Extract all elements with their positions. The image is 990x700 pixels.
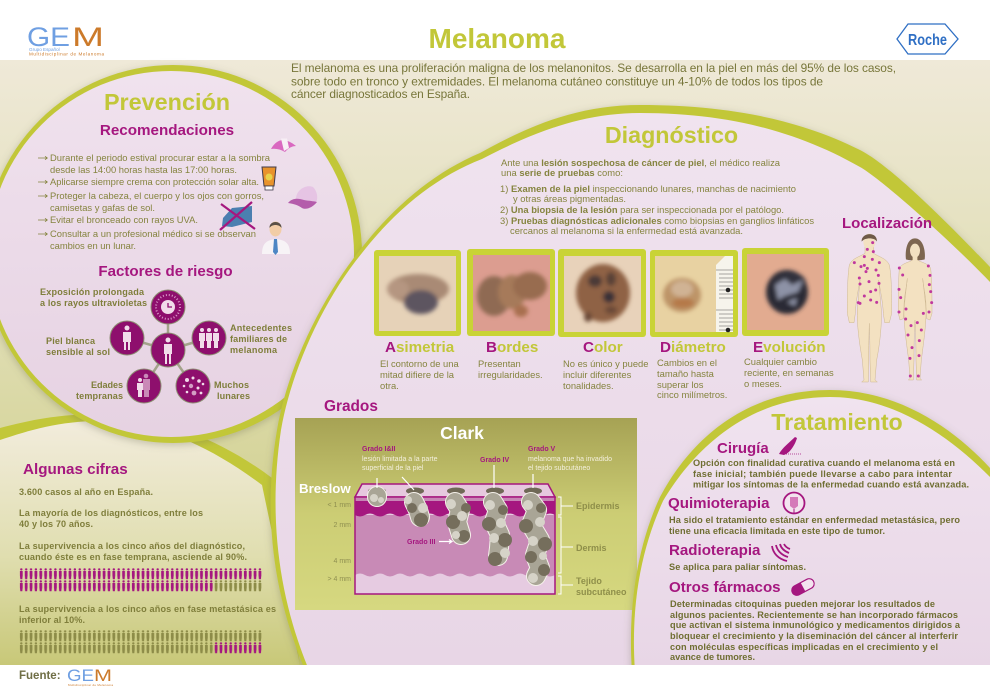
ABCDE labels: Evolución: [753, 339, 826, 356]
diagnosis text: [500, 157, 814, 236]
ABCDE descriptions: o meses.: [744, 378, 782, 389]
icon: person fair skin: [123, 326, 131, 350]
recommendations list: Durante el periodo estival procurar estar a la sombra: [50, 152, 271, 163]
treatment: cirugía: fase inicial; también puede llevarse a cabo para intentar: [693, 469, 952, 479]
panel: Clark diagram: [295, 418, 637, 610]
pictogram: 10 percent survival: [19, 630, 262, 654]
treatment: otros fármacos: Otros fármacos: [669, 579, 781, 596]
female figure: [897, 238, 933, 380]
panel: algunas cifras background: [0, 414, 300, 665]
source: Multidisciplinar de Melanoma: [68, 683, 113, 687]
recommendations list: Aplicarse siempre crema con protección solar alta.: [50, 176, 259, 187]
treatment: radioterapia: Radioterapia: [669, 542, 761, 559]
icon: cap: [288, 186, 317, 209]
layer labels: Tejido: [576, 576, 602, 586]
layer brackets: [558, 497, 573, 594]
recommendations list: camisetas y gafas de sol.: [50, 202, 155, 213]
icon: pill: [790, 577, 816, 597]
ABCDE descriptions: Presentan: [478, 358, 521, 369]
ABCDE descriptions: incluir diferentes: [563, 369, 632, 380]
logo: GEM: Grupo Español: [29, 47, 60, 52]
figures text: inferior al 10%.: [19, 615, 85, 625]
icon: ages: [137, 374, 150, 397]
recommendations list: Evitar el bronceado con rayos UVA.: [50, 214, 198, 225]
risk factor labels: Edades: [91, 380, 123, 390]
treatment: cirugía: Cirugía: [717, 440, 769, 457]
skin block: [355, 484, 555, 594]
grade labels: lesión limitada a la parte: [362, 456, 438, 463]
ABCDE descriptions: El contorno de una: [380, 358, 459, 369]
photo: bordes: [467, 249, 555, 336]
photo: color: [558, 249, 646, 337]
heading: Grados: Grados: [324, 398, 378, 415]
treatment: quimioterapia: Ha sido el tratamiento estándar en enfermedad metastásica, pero: [669, 515, 960, 525]
heading: Algunas cifras: Algunas cifras: [23, 461, 128, 478]
treatment: otros fármacos: Determinadas citoquinas pueden mejorar los resultados de: [670, 599, 935, 609]
ABCDE descriptions: reciente, en semanas: [744, 367, 834, 378]
ABCDE descriptions: mitad difiere de la: [380, 369, 455, 380]
ruler: [716, 256, 733, 332]
melanoma columns: [368, 488, 552, 583]
treatment: quimioterapia: [668, 492, 960, 536]
intro text: sobre todo en tronco y extremidades. El melanoma cutáneo constituye un 4-10% de todos los tipos de: [291, 74, 823, 88]
logo: GEM: [27, 22, 104, 56]
ABCDE descriptions: tonalidades.: [563, 380, 614, 391]
treatment: otros fármacos: que activan el sistema inmunológico y medicamentos dirigidos a: [670, 620, 961, 630]
ABCDE descriptions: cinco milímetros.: [657, 389, 727, 400]
recommendations list: Consultar a un profesional médico si se observan: [50, 228, 256, 239]
icon: family: [199, 328, 219, 348]
grade labels: [362, 446, 612, 546]
grade labels: superficial de la piel: [362, 465, 424, 472]
diagnosis text: cercanos al melanoma si la enfermedad está avanzada.: [510, 225, 743, 236]
figures text: 40 y los 70 años.: [19, 519, 93, 529]
treatment: cirugía: [693, 437, 969, 490]
intro text: cáncer diagnosticados en España.: [291, 87, 470, 101]
recommendations list: [38, 152, 271, 251]
heading: Tratamiento: Tratamiento: [771, 409, 903, 435]
breslow scale: 4 mm: [334, 558, 351, 565]
risk factor labels: sensible al sol: [46, 347, 110, 357]
risk factor labels: lunares: [217, 391, 250, 401]
logo: GEM: Multidisciplinar de Melanoma: [29, 52, 104, 56]
intro text: El melanoma es una proliferación maligna de los melanonitos. Se desarrolla en la piel en más del 95% de los casos,: [291, 61, 896, 75]
risk factor diagram: [110, 290, 226, 403]
body map: [847, 234, 933, 382]
risk factor labels: melanoma: [230, 345, 278, 355]
risk factor labels: Antecedentes: [230, 323, 292, 333]
grade labels: Grado V: [528, 446, 556, 453]
male figure: [847, 234, 892, 382]
layer labels: subcutáneo: [576, 587, 627, 597]
icon: radiation waves: [772, 544, 790, 561]
grade labels: Grado III: [407, 539, 435, 546]
intro text: [291, 61, 896, 101]
heading: Diagnóstico: Diagnóstico: [605, 122, 738, 148]
title: Melanoma: [429, 23, 566, 54]
heading: Factores de riesgo: Factores de riesgo: [98, 263, 233, 280]
panel: tratamiento shape: [631, 390, 990, 672]
diagnosis text: una serie de pruebas como:: [501, 167, 623, 178]
treatment: otros fármacos: avance de tumores.: [670, 652, 755, 662]
grade labels: melanoma que ha invadido: [528, 456, 612, 463]
ABCDE labels: Diámetro: [660, 339, 726, 356]
icon: sunscreen: [262, 167, 276, 190]
diagnosis text: 2) Una biopsia de la lesión para ser inspeccionada por el patólogo.: [500, 204, 784, 215]
photo: asimetría: [374, 250, 461, 336]
treatment: quimioterapia: tiene una eficacia limitada en este tipo de tumor.: [669, 526, 885, 536]
diagnosis text: Ante una lesión sospechosa de cáncer de piel, el médico realiza: [501, 157, 781, 168]
ABCDE descriptions: No es único y puede: [563, 358, 648, 369]
source: Fuente:: [19, 670, 61, 682]
icon: scalpel: [779, 437, 802, 455]
treatment: cirugía: Opción con finalidad curativa cuando el melanoma está en: [693, 458, 955, 468]
logo: Roche: Roche: [908, 32, 947, 49]
icon: umbrella: [271, 138, 296, 152]
risk factor labels: Piel blanca: [46, 336, 96, 346]
bottom white band: [0, 665, 990, 700]
breslow scale: [327, 502, 351, 583]
risk factor labels: a los rayos ultravioletas: [40, 298, 147, 308]
ABCDE labels: Asimetria: [385, 339, 455, 356]
figures text: La supervivencia a los cinco años del diagnóstico,: [19, 541, 245, 551]
photo: evolución: [742, 248, 829, 336]
treatment: otros fármacos: bloquear el crecimiento y la diseminación del cáncer al interferir: [670, 631, 958, 641]
heading: Recomendaciones: Recomendaciones: [100, 122, 234, 139]
treatment: otros fármacos: [669, 577, 961, 662]
icon: center person: [164, 338, 172, 364]
recommendations list: Proteger la cabeza, el cuerpo y los ojos con gorros,: [50, 190, 264, 201]
grade labels: el tejido subcutáneo: [528, 465, 590, 472]
diagnosis text: 3) Pruebas diagnósticas adicionales como biopsias en ganglios linfáticos: [500, 215, 814, 226]
risk factor labels: Exposición prolongada: [40, 287, 145, 297]
ABCDE descriptions: Cambios en el: [657, 357, 717, 368]
logo: Roche: [897, 24, 958, 54]
pointers: [377, 465, 533, 544]
risk factor labels: tempranas: [76, 391, 123, 401]
figures text: [19, 487, 276, 625]
risk factor labels: familiares de: [230, 334, 287, 344]
treatment: otros fármacos: algunos pacientes. Recientemente se han incorporado fármacos: [670, 610, 958, 620]
treatment: radioterapia: [669, 542, 806, 572]
ABCDE labels: Color: [583, 339, 623, 356]
layer labels: [576, 501, 627, 597]
ABCDE descriptions: superar los: [657, 379, 704, 390]
icon: IV bag: [784, 492, 804, 514]
panel: prevención circle: [0, 65, 362, 443]
icon: sun clock: [156, 295, 180, 319]
source: [19, 666, 113, 687]
breslow scale: 2 mm: [334, 522, 351, 529]
layer labels: Dermis: [576, 543, 607, 553]
logo: GEM: GE: [27, 22, 70, 52]
risk factor labels: Muchos: [214, 380, 249, 390]
breslow scale: > 4 mm: [327, 576, 351, 583]
ABCDE labels: [385, 339, 826, 356]
ABCDE descriptions: otra.: [380, 380, 399, 391]
diagnosis text: y otras áreas pigmentadas.: [513, 193, 626, 204]
photo: diámetro: [650, 250, 738, 337]
ABCDE descriptions: tamaño hasta: [657, 368, 715, 379]
source: M: [94, 666, 112, 685]
ABCDE descriptions: [380, 356, 834, 400]
heading: Breslow: Breslow: [299, 481, 351, 496]
figures text: cuando éste es en fase temprana, asciende al 90%.: [19, 552, 247, 562]
ABCDE descriptions: irregularidades.: [478, 369, 543, 380]
pictogram: 90 percent survival: [19, 568, 262, 592]
icon: moles: [183, 376, 204, 395]
breslow scale: < 1 mm: [327, 502, 351, 509]
ABCDE labels: Bordes: [486, 339, 538, 356]
risk factor labels: [40, 287, 292, 401]
treatment: cirugía: mitigar los síntomas de la enfermedad cuando está avanzada.: [693, 480, 969, 490]
treatment: otros fármacos: con moléculas específicas implicadas en el crecimiento y el: [670, 642, 938, 652]
ABCDE descriptions: Cualquier cambio: [744, 356, 817, 367]
grade labels: Grado I&II: [362, 446, 396, 453]
heading: Prevención: Prevención: [104, 89, 230, 115]
figures text: La supervivencia a los cinco años en fase metastásica es: [19, 604, 276, 614]
treatment: quimioterapia: Quimioterapia: [668, 495, 770, 512]
layer labels: Epidermis: [576, 501, 620, 511]
recommendations list: desde las 14:00 horas hasta las 17:00 horas.: [50, 164, 237, 175]
figures text: 3.600 casos al año en España.: [19, 487, 153, 497]
icon: doctor: [262, 222, 290, 255]
source: GE: [67, 666, 94, 685]
icon: tanning bed crossed out: [220, 202, 255, 230]
grade labels: Grado IV: [480, 457, 510, 464]
logo: GEM: M: [72, 22, 104, 52]
treatment: radioterapia: Se aplica para paliar síntomas.: [669, 562, 806, 572]
recommendations list: cambios en un lunar.: [50, 240, 136, 251]
diagnosis text: 1) Examen de la piel inspeccionando lunares, manchas de nacimiento: [500, 183, 796, 194]
panel: diagnóstico shape: [271, 105, 990, 670]
heading: Clark: Clark: [440, 423, 484, 443]
figures text: La mayoría de los diagnósticos, entre los: [19, 508, 203, 518]
heading: Localización: Localización: [842, 215, 932, 232]
